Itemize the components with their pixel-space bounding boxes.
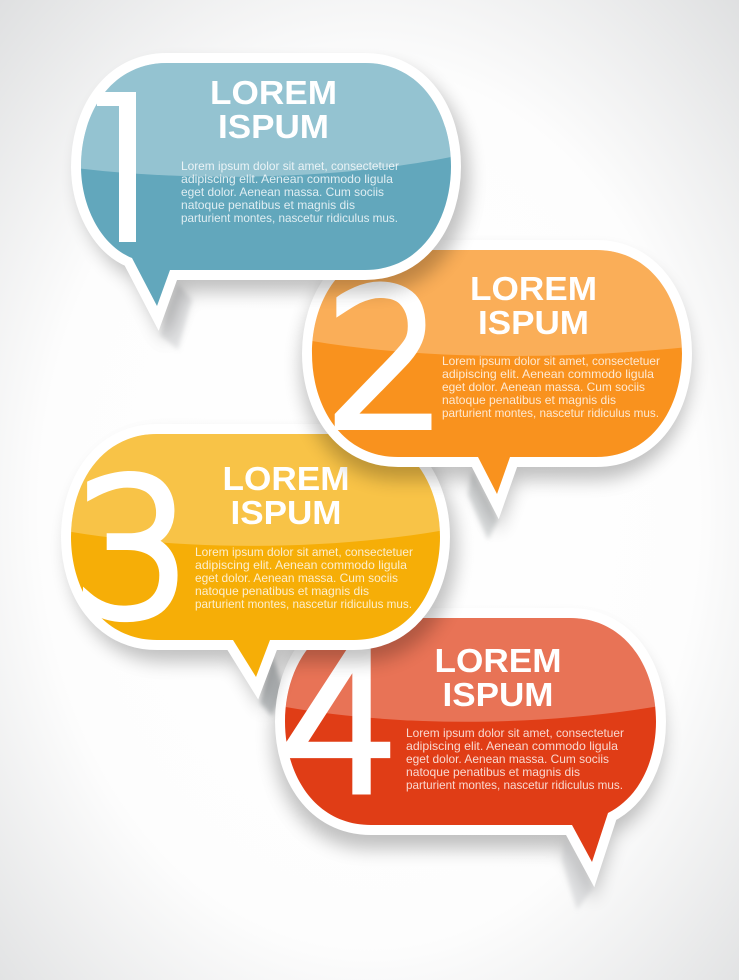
bubble 3 body text: natoque penatibus et magnis dis bbox=[195, 585, 369, 598]
bubble 2 body text: Lorem ipsum dolor sit amet, consectetuer bbox=[442, 355, 660, 368]
bubble 2 heading: LOREM bbox=[470, 270, 597, 307]
bubble 2 body bbox=[312, 250, 682, 494]
bubble 2 shadow bbox=[311, 263, 681, 507]
bubble 4 body bbox=[285, 618, 656, 862]
bubble 3 body text: parturient montes, nascetur ridiculus mus. bbox=[195, 598, 412, 611]
bubble 4 body text: eget dolor. Aenean massa. Cum sociis bbox=[406, 753, 609, 766]
bubble 4 body text bbox=[406, 727, 624, 792]
bubble 2 body text: parturient montes, nascetur ridiculus mus. bbox=[442, 407, 659, 420]
bubble 2 body text: eget dolor. Aenean massa. Cum sociis bbox=[442, 381, 645, 394]
tail shadow: bubble 1 bbox=[160, 284, 192, 350]
bubble 3 heading: LOREM bbox=[222, 460, 350, 497]
bubble 2: orange bbox=[306, 240, 688, 507]
bubble 3 heading bbox=[222, 460, 350, 531]
bubble 3 body text bbox=[195, 546, 413, 611]
number 1: 1 bbox=[68, 66, 188, 285]
bubble 3 heading: ISPUM bbox=[230, 494, 342, 531]
bubble 4 body text: Lorem ipsum dolor sit amet, consectetuer bbox=[406, 727, 624, 740]
bubble 4 tail shadow bbox=[562, 838, 593, 910]
bubble 1 body text: eget dolor. Aenean massa. Cum sociis bbox=[181, 186, 384, 199]
tail shadow: bubble 2 bbox=[468, 470, 498, 540]
bubble 4: red bbox=[280, 610, 660, 910]
bubble 1: blue bbox=[68, 55, 459, 318]
bubble 1 heading bbox=[210, 74, 337, 145]
bubble 3 shadow bbox=[78, 446, 447, 689]
number 2: 2 bbox=[326, 252, 446, 470]
bubble 1 heading: ISPUM bbox=[218, 108, 329, 145]
bubble 2 body text: adipiscing elit. Aenean commodo ligula bbox=[442, 368, 655, 381]
bubble 4 heading: LOREM bbox=[434, 642, 562, 679]
bubble 3 gloss bbox=[66, 425, 445, 546]
bubble 1 heading: LOREM bbox=[210, 74, 337, 111]
bubble 1 body text bbox=[181, 160, 399, 225]
bubble 1 gloss bbox=[76, 55, 456, 177]
bubble 4 heading: ISPUM bbox=[442, 676, 554, 713]
bubble 2 gloss bbox=[312, 250, 682, 356]
number 1 bbox=[97, 92, 136, 242]
bubble 1 shadow bbox=[89, 75, 459, 318]
bubble 2 body text bbox=[442, 355, 660, 420]
bubble 4 body text: adipiscing elit. Aenean commodo ligula bbox=[406, 740, 619, 753]
tail shadow: bubble 3 bbox=[260, 655, 284, 716]
bubble 3: yellow bbox=[66, 425, 447, 689]
bubble 3 body text: eget dolor. Aenean massa. Cum sociis bbox=[195, 572, 398, 585]
bubble 4 body text: natoque penatibus et magnis dis bbox=[406, 766, 580, 779]
bubble 3 body text: adipiscing elit. Aenean commodo ligula bbox=[195, 559, 408, 572]
bubble 3 body bbox=[71, 434, 440, 677]
bubble 4 gloss bbox=[280, 610, 660, 722]
bubble 1 body text: Lorem ipsum dolor sit amet, consectetuer bbox=[181, 160, 399, 173]
number 3: 3 bbox=[73, 441, 193, 660]
bubble 1 body bbox=[81, 63, 451, 306]
bubble 4 heading bbox=[434, 642, 562, 713]
bubble 4 shadow bbox=[283, 632, 654, 876]
bubble 1 body text: natoque penatibus et magnis dis bbox=[181, 199, 355, 212]
bubble 2 heading bbox=[470, 270, 597, 341]
bubble 2 heading: ISPUM bbox=[478, 304, 589, 341]
bubble 1 body text: adipiscing elit. Aenean commodo ligula bbox=[181, 173, 394, 186]
number 4: 4 bbox=[281, 616, 401, 835]
bubble 4 body text: parturient montes, nascetur ridiculus mus. bbox=[406, 779, 623, 792]
bubble 1 body text: parturient montes, nascetur ridiculus mus. bbox=[181, 212, 398, 225]
bubble 3 body text: Lorem ipsum dolor sit amet, consectetuer bbox=[195, 546, 413, 559]
bubble 2 body text: natoque penatibus et magnis dis bbox=[442, 394, 616, 407]
